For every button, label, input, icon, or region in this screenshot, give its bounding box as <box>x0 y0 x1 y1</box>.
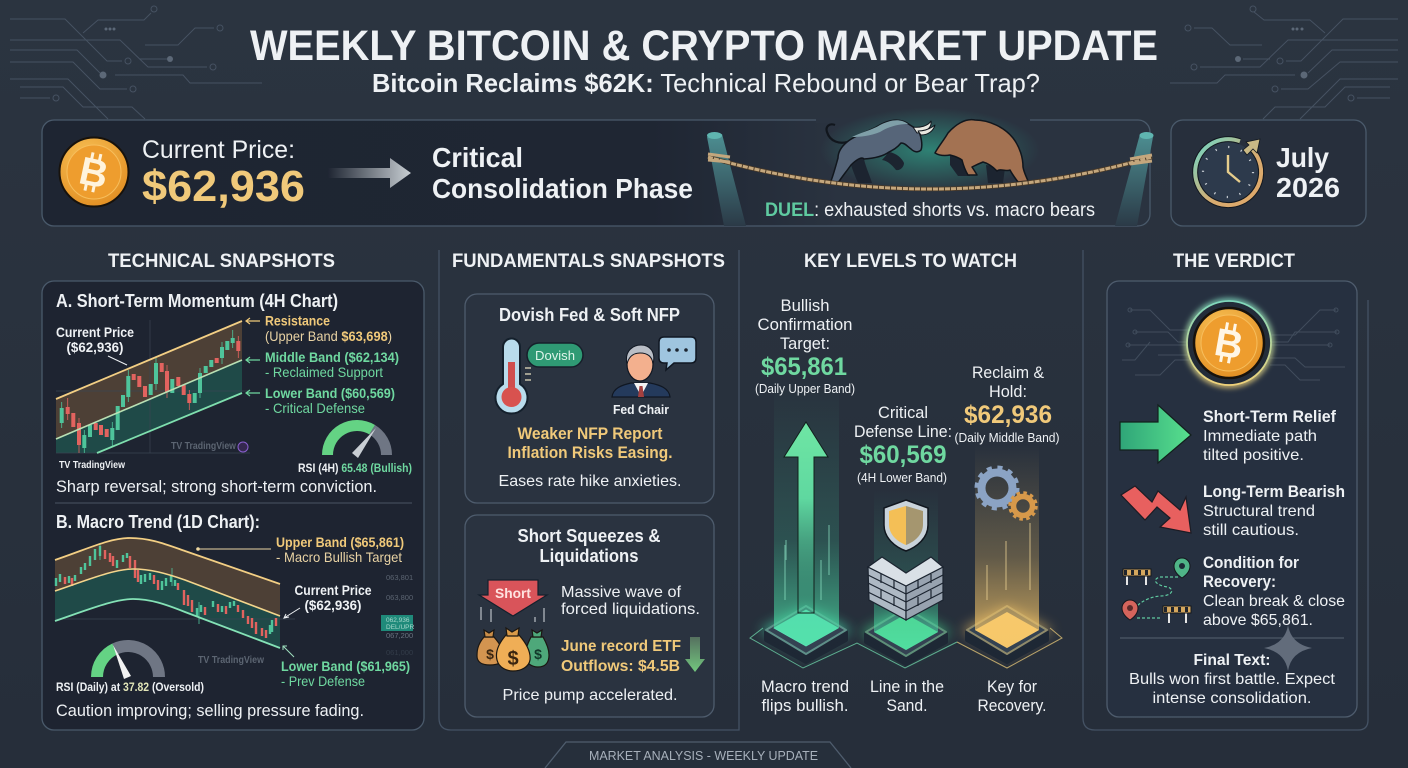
chart label: lower band: Lower Band ($61,965) <box>281 658 410 674</box>
chart label: current price <box>284 583 372 618</box>
final text <box>1129 652 1336 707</box>
chart label: upper band: Upper Band ($65,861) <box>276 534 404 550</box>
liquidation text: Massive wave of <box>561 584 682 601</box>
icon: fed chair <box>612 337 696 397</box>
gold callout: Inflation Risks Easing. <box>508 444 672 462</box>
icon: money bags: $ <box>534 646 542 662</box>
verdict: short-term relief <box>1203 408 1336 464</box>
card heading: Short Squeezes & <box>518 526 660 546</box>
icon: down arrow <box>685 637 705 672</box>
verdict: condition for recovery: Recovery: <box>1203 573 1276 591</box>
ETF outflows callout: June record ETF <box>561 638 681 655</box>
chart label: current price <box>56 325 134 365</box>
icon: money bags: $ <box>486 646 494 662</box>
card heading: Liquidations <box>540 546 638 566</box>
chart label: current price: ($62,936) <box>304 598 362 613</box>
verdict: long-term bearish: Long-Term Bearish <box>1203 483 1345 501</box>
duel caption: DUEL: exhausted shorts vs. macro bears <box>765 200 1095 221</box>
footer tab: MARKET ANALYSIS - WEEKLY UPDATE <box>589 748 818 763</box>
liquidation text: forced liquidations. <box>561 601 700 618</box>
badge: dovish: Dovish <box>535 348 575 363</box>
chart: 1D candlesticks with bands <box>55 538 295 648</box>
icon: short arrow: Short <box>495 585 531 601</box>
circuit traces around coin <box>1122 308 1345 380</box>
subtitle: Bitcoin Reclaims $62K: Technical Rebound or Bear Trap? <box>372 68 1040 98</box>
final text: intense consolidation. <box>1152 690 1312 707</box>
level 2: critical defense <box>854 404 952 715</box>
panel: price banner <box>42 108 1154 226</box>
icon: bull <box>827 120 935 183</box>
base outline <box>750 628 1062 668</box>
card heading: Dovish Fed & Soft NFP <box>499 305 680 325</box>
price axis: 063,800 <box>386 593 413 602</box>
chart label: upper band: - Macro Bullish Target <box>276 549 402 565</box>
level 1: bullish target: Confirmation <box>758 316 852 334</box>
RSI 4H label: RSI (4H) 65.48 (Bullish) <box>298 461 412 475</box>
icon: money bags <box>477 628 549 671</box>
final text: Bulls won first battle. Expect <box>1129 671 1336 688</box>
label: lower band <box>265 385 395 416</box>
level 2: critical defense: Line in the <box>870 677 944 696</box>
verdict: short-term relief: Immediate path <box>1203 428 1317 445</box>
panel: short squeeze card <box>465 515 714 717</box>
card note: Price pump accelerated. <box>502 687 678 704</box>
phase label: Consolidation Phase <box>432 173 693 204</box>
label: middle band: Middle Band ($62,134) <box>265 349 399 365</box>
icon: green right arrow <box>1120 405 1191 463</box>
panel: key levels <box>750 297 1062 715</box>
icon: shield <box>884 500 928 551</box>
chart label: current price: ($62,936) <box>66 340 124 355</box>
section A summary: Sharp reversal; strong short-term conviction. <box>56 477 377 496</box>
label: resistance <box>265 312 392 344</box>
level 3: reclaim and hold: Reclaim & <box>972 364 1044 382</box>
ETF outflows callout <box>561 638 681 675</box>
icon: thermometer <box>496 338 531 414</box>
heading: key levels: KEY LEVELS TO WATCH <box>804 251 1017 272</box>
panel: dovish fed card <box>465 294 714 503</box>
level 2: critical defense: (4H Lower Band) <box>857 471 947 485</box>
price axis: 067,200 <box>386 631 413 640</box>
verdict: short-term relief: tilted positive. <box>1203 447 1304 464</box>
level 1: bullish target: Target: <box>780 335 830 353</box>
price axis: 061,000 <box>386 648 413 657</box>
verdict: condition for recovery <box>1203 554 1345 629</box>
date text: July <box>1276 142 1329 173</box>
icon: money bags: $ <box>507 648 519 670</box>
label: resistance: Resistance <box>265 312 330 328</box>
verdict: long-term bearish <box>1203 483 1345 539</box>
icon: bitcoin coin: B <box>75 150 112 197</box>
level 1: bullish target: flips bullish. <box>762 696 848 715</box>
label: middle band <box>265 349 399 380</box>
phase label <box>432 142 693 204</box>
heading: fundamentals snapshots: FUNDAMENTALS SNAPSHOTS <box>452 251 725 272</box>
level 3: reclaim and hold: Hold: <box>989 383 1027 401</box>
panel: date <box>1171 120 1366 226</box>
price axis: 062,936 <box>386 617 410 624</box>
gauge: RSI 4H <box>328 425 386 458</box>
title: WEEKLY BITCOIN & CRYPTO MARKET UPDATE <box>250 22 1158 70</box>
card note: Eases rate hike anxieties. <box>498 473 682 490</box>
icon: bear <box>935 120 1028 183</box>
heading: the verdict: THE VERDICT <box>1173 251 1295 272</box>
icon: short arrow <box>479 580 547 622</box>
label: middle band: - Reclaimed Support <box>265 364 383 380</box>
gold callout: Weaker NFP Report <box>518 425 663 443</box>
fed chair label: Fed Chair <box>613 402 669 417</box>
icon: clock <box>1195 139 1261 205</box>
icon: bitcoin coin <box>60 138 128 206</box>
panel: verdict <box>1107 281 1357 717</box>
footer tab <box>545 742 851 768</box>
level 2: critical defense: Defense Line: <box>854 423 952 441</box>
chart label: current price: Current Price <box>56 325 134 340</box>
verdict: short-term relief: Short-Term Relief <box>1203 408 1336 426</box>
level 3: reclaim and hold <box>954 364 1060 715</box>
level 3: reclaim and hold: Key for <box>987 677 1037 696</box>
ETF outflows callout: Outflows: $4.5B <box>561 658 680 675</box>
decorative sparkle <box>1264 625 1312 671</box>
level 1: bullish target: Bullish <box>780 297 830 315</box>
duel illustration: bull and bear on rope <box>707 108 1154 226</box>
background circuit traces <box>10 6 1398 119</box>
label: lower band: Lower Band ($60,569) <box>265 385 395 401</box>
card heading <box>518 526 660 566</box>
chart label: upper band <box>196 534 404 565</box>
badge: dovish <box>527 343 583 367</box>
gold callout <box>508 425 672 462</box>
level 1: bullish target: Macro trend <box>761 677 849 696</box>
icon: recovery route <box>1122 558 1191 623</box>
date text: 2026 <box>1276 172 1340 203</box>
icon: up arrow <box>784 422 828 613</box>
date text <box>1276 142 1340 203</box>
arrow: price to phase <box>328 158 411 188</box>
label: lower band: - Critical Defense <box>265 400 365 416</box>
price axis: 063,801 <box>386 573 413 582</box>
tradingview watermark: TV TradingView <box>171 440 237 452</box>
phase label: Critical <box>432 142 523 173</box>
tradingview watermark: TV TradingView <box>198 654 265 666</box>
icon: bitcoin coin: B <box>1211 321 1246 368</box>
gauge: RSI daily <box>97 645 159 679</box>
section B title: B. Macro Trend (1D Chart): <box>56 511 260 532</box>
price axis: DEL/UPR <box>386 624 414 631</box>
current price value: $62,936 <box>142 162 305 211</box>
level 2: critical defense: Critical <box>878 404 928 422</box>
level 2: critical defense: Sand. <box>886 696 928 715</box>
label: resistance: (Upper Band $63,698) <box>265 328 392 344</box>
price axis <box>381 573 414 657</box>
verdict: long-term bearish: still cautious. <box>1203 522 1299 539</box>
level 3: reclaim and hold: Recovery. <box>978 696 1046 715</box>
chart: 4H candlesticks with bands <box>56 320 250 453</box>
level 3: reclaim and hold: (Daily Middle Band) <box>954 431 1060 445</box>
chart label: lower band <box>281 646 410 689</box>
section A title: A. Short-Term Momentum (4H Chart) <box>56 290 338 311</box>
current price label: Current Price: <box>142 136 295 164</box>
level 2: critical defense: $60,569 <box>860 441 946 469</box>
heading: technical snapshots: TECHNICAL SNAPSHOTS <box>108 251 335 272</box>
level 1: bullish target: (Daily Upper Band) <box>755 382 855 396</box>
icon: red zigzag down arrow <box>1121 486 1191 533</box>
panel: technical snapshots <box>42 281 424 730</box>
section B summary: Caution improving; selling pressure fading. <box>56 701 364 720</box>
verdict: condition for recovery: Condition for <box>1203 554 1300 572</box>
chart label: current price: Current Price <box>294 583 372 598</box>
verdict: condition for recovery: Clean break & close <box>1203 593 1345 610</box>
level 1: bullish target: $65,861 <box>761 353 847 381</box>
RSI daily label: RSI (Daily) at 37.82 (Oversold) <box>56 680 204 694</box>
verdict: condition for recovery: above $65,861. <box>1203 612 1313 629</box>
icon: bitcoin coin <box>1187 301 1271 385</box>
verdict: long-term bearish: Structural trend <box>1203 503 1315 520</box>
final text: Final Text: <box>1194 652 1270 669</box>
icon: gears <box>977 468 1036 519</box>
level 1: bullish target <box>755 297 855 715</box>
liquidation text <box>561 584 700 618</box>
chart label: lower band: - Prev Defense <box>281 673 365 689</box>
rope <box>708 154 1152 189</box>
tradingview logo text: TV TradingView <box>59 459 126 471</box>
icon: brick wall <box>868 557 943 620</box>
level 3: reclaim and hold: $62,936 <box>964 401 1052 429</box>
